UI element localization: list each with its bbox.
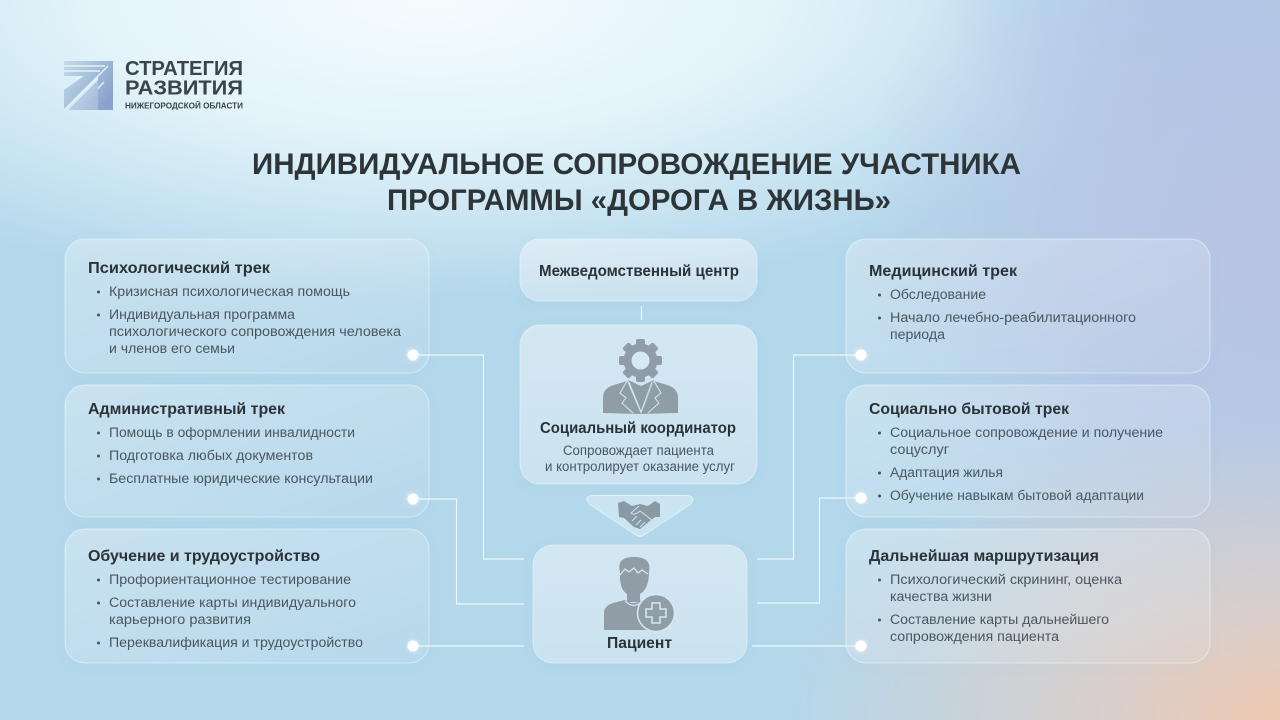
title: ПРОГРАММЫ «ДОРОГА В ЖИЗНЬ» [387,184,891,217]
title [252,148,1021,217]
logo text: НИЖЕГОРОДСКОЙ ОБЛАСТИ [125,100,243,110]
list: education and employment: Составление карты индивидуального [109,595,356,610]
list: social and household track: Обучение навыкам бытовой адаптации [890,488,1144,503]
panel: interagency center [520,239,757,301]
panel: psychological track [65,239,429,373]
list: medical track: периода [890,327,946,342]
list: psychological track: и членов его семьи [109,341,235,356]
description: social coordinator: Сопровождает пациента [563,443,714,458]
logo [64,58,243,110]
list: administrative track: Подготовка любых документов [109,448,313,463]
panel: medical track [846,239,1210,373]
heading: psychological track: Психологический трек [88,260,271,277]
list: social and household track: Социальное сопровождение и получение [890,425,1163,440]
panel: patient [533,545,747,663]
panel: social coordinator [520,325,757,484]
list: medical track: Обследование [890,287,986,302]
list: medical track [878,287,1136,342]
list: education and employment: Переквалификация и трудоустройство [109,635,363,650]
heading: administrative track: Административный трек [88,401,286,418]
heading: patient: Пациент [607,635,672,652]
list: psychological track: психологического сопровождения человека [109,324,402,339]
list: administrative track [97,425,373,486]
heading: social and household track: Социально бытовой трек [869,401,1070,418]
icon: coordinator with gear [603,339,678,414]
arrow: handshake triangle [587,496,693,536]
list: further routing: сопровождения пациента [890,629,1060,644]
list: social and household track [878,425,1163,503]
heading: further routing: Дальнейшая маршрутизация [869,548,1099,565]
list: further routing: Составление карты дальнейшего [890,612,1109,627]
panel: interagency center: Межведомственный центр [539,263,739,280]
heading: medical track: Медицинский трек [869,263,1018,280]
icon: handshake [618,501,660,529]
list: education and employment: карьерного развития [109,612,251,627]
logo text [125,58,243,110]
logo mark [64,61,113,110]
panel: education and employment [65,529,429,663]
list: further routing [878,572,1123,644]
list: administrative track: Бесплатные юридические консультации [109,471,373,486]
list: social and household track: соцуслуг [890,442,949,457]
logo text: РАЗВИТИЯ [125,78,243,100]
title: ИНДИВИДУАЛЬНОЕ СОПРОВОЖДЕНИЕ УЧАСТНИКА [252,148,1021,181]
list: administrative track: Помощь в оформлении инвалидности [109,425,355,440]
connector dots [408,350,866,652]
logo text: СТРАТЕГИЯ [125,58,243,80]
heading: social coordinator: Социальный координатор [540,420,736,437]
panel: social and household track [846,385,1210,517]
description: social coordinator: и контролирует оказание услуг [545,459,735,474]
panel: further routing [846,529,1210,663]
description: social coordinator [545,443,735,474]
list: medical track: Начало лечебно-реабилитационного [890,310,1136,325]
heading: education and employment: Обучение и трудоустройство [88,548,320,565]
list: psychological track: Индивидуальная программа [109,307,296,322]
list: psychological track: Кризисная психологическая помощь [109,284,350,299]
panel: administrative track [65,385,429,517]
list: social and household track: Адаптация жилья [890,465,1003,480]
icon: patient with medical cross [604,557,674,632]
list: psychological track [97,284,402,356]
list: further routing: Психологический скрининг, оценка [890,572,1123,587]
list: education and employment: Профориентационное тестирование [109,572,351,587]
list: further routing: качества жизни [890,589,992,604]
connector lines [412,306,861,646]
list: education and employment [97,572,363,650]
